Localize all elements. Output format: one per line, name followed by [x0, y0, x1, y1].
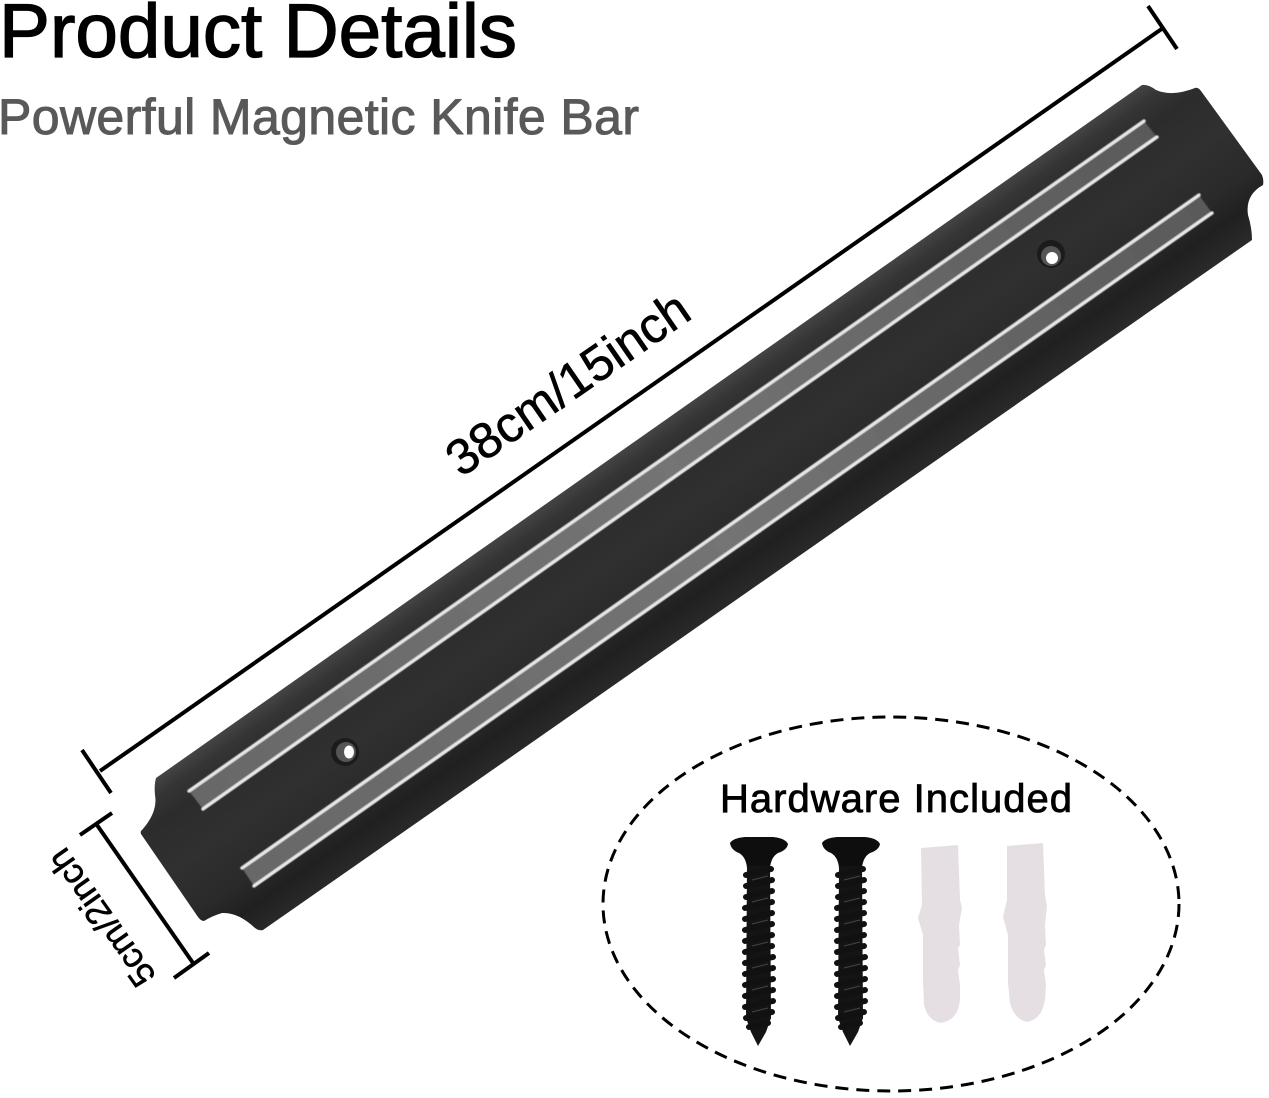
dimension arrow: width — [80, 813, 209, 978]
mounting hole: upper — [1037, 240, 1065, 268]
dashed oval — [603, 717, 1179, 1091]
hardware callout — [603, 717, 1179, 1091]
bar body — [141, 85, 1263, 930]
mounting hole: lower — [331, 738, 359, 766]
top magnetic rail — [189, 121, 1157, 809]
magnetic knife bar — [141, 85, 1263, 930]
length label: 38cm/15inch — [435, 280, 700, 487]
dimension arrow: length — [82, 6, 1177, 793]
hardware heading: Hardware Included — [720, 777, 1072, 821]
icon: wall anchor 2 — [1003, 843, 1047, 1022]
icon: wall anchor 1 — [918, 845, 962, 1023]
icon: screw 2 — [822, 837, 880, 1046]
width label: 5cm/2inch — [40, 841, 164, 994]
subtitle: Powerful Magnetic Knife Bar — [0, 89, 639, 145]
icon: screw 1 — [730, 837, 788, 1046]
bottom magnetic rail — [242, 195, 1212, 886]
